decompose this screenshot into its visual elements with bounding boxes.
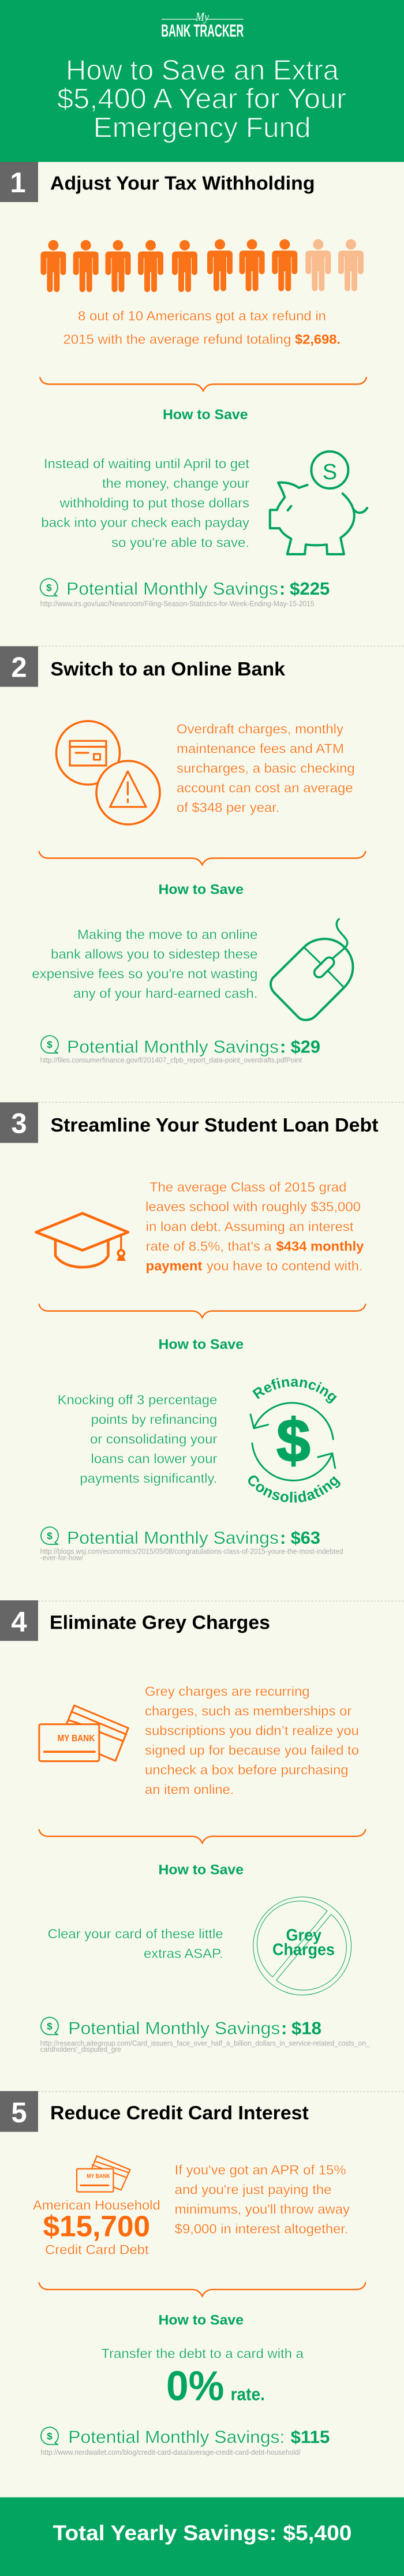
savings row 4: : [281,2018,287,2038]
how to save label: How to Save [158,1337,244,1353]
panel: header [0,0,404,162]
problem text 4: an item online. [145,1782,234,1797]
how to save text: Knocking off 3 percentage [58,1392,217,1407]
icon: dollar bubble [41,2427,58,2444]
debt statistic: $15,700 [43,2209,150,2242]
how to save text: any of your hard-earned cash. [73,986,257,1001]
how to save label: How to Save [158,2313,244,2328]
statistic text: $2,698. [295,331,341,346]
icon: refinancing consolidating cycle: Consolidating [248,1476,341,1503]
icon: refinancing consolidating cycle: $ [276,1407,311,1475]
icon: no grey charges sign: Charges [272,1941,335,1959]
logo: My Bank Tracker: BANK TRACKER [161,21,244,40]
how to save text: bank allows you to sidestep these [51,947,257,962]
heading 1: Adjust Your Tax Withholding [50,172,315,193]
source url 4 [40,2039,370,2054]
problem text 2 [177,722,355,815]
problem text 3: in loan debt. Assuming an interest [146,1219,354,1234]
how to save text: Transfer the debt to a card with a [101,2346,304,2361]
how to save text [48,1926,223,1961]
how to save text: Instead of waiting until April to get [44,456,250,471]
heading 5: Reduce Credit Card Interest [50,2102,309,2123]
how to save text: payments significantly. [80,1470,217,1485]
icon: bank cards [39,1705,128,1761]
icon: bank cards: MY BANK [58,1734,95,1744]
brace [39,1829,365,1843]
number badge 4 [0,1600,38,1641]
problem text 2: maintenance fees and ATM [177,741,344,756]
heading 2: Switch to an Online Bank [51,658,286,680]
savings row 1: $225 [290,578,330,599]
savings row 1: : [279,578,285,599]
debt statistic: Credit Card Debt [45,2242,149,2257]
problem text 3: rate of 8.5%, that's a [146,1238,272,1253]
problem text 3: leaves school with roughly $35,000 [145,1199,361,1214]
brace [39,2282,365,2296]
how to save text: Making the move to an online [77,927,257,942]
icon: dollar bubble: $ [46,582,52,593]
title: $5,400 A Year for Your [57,83,346,114]
problem text 4: signed up for because you failed to [145,1742,359,1757]
how to save label: How to Save [158,1862,244,1878]
problem text 4: subscriptions you didn’t realize you [145,1723,359,1738]
icon: bank cards small: MY BANK [87,2173,110,2179]
savings row 4: $18 [291,2018,321,2038]
source url 3: -ever-for-now/ [40,1554,83,1562]
debt statistic [33,2198,160,2257]
problem text 2: account can cost an average [177,781,353,796]
number badge 1 [0,162,38,202]
icon: computer mouse [271,919,353,1020]
icon: piggy bank with coin [270,451,367,554]
source url 5: http://www.nerdwallet.com/blog/credit-card-data/average-credit-card-debt-household/ [40,2448,301,2456]
icon: dollar bubble [41,1527,58,1544]
problem text 3: you have to contend with. [207,1258,363,1273]
how to save text: withholding to put those dollars [59,495,249,510]
panel: section 1 adjust your tax withholding [0,162,367,608]
title: Emergency Fund [93,112,311,143]
title: How to Save an Extra [66,55,339,86]
brace [39,851,365,865]
problem text 2: of $348 per year. [177,800,279,815]
brace [40,377,366,391]
icon: refinancing consolidating cycle: Refinancing [252,1377,337,1403]
problem text 5: If you've got an APR of 15% [175,2163,346,2178]
source url 3 [40,1547,343,1562]
heading 4: Eliminate Grey Charges [50,1612,270,1633]
how to save text [41,456,250,550]
icon: dollar bubble: $ [47,2021,53,2032]
problem text 4: uncheck a box before purchasing [145,1762,349,1777]
savings row 1: Potential Monthly Savings [66,578,278,599]
number badge 5 [0,2091,38,2132]
statistic text: 2015 with the average refund totaling [63,331,291,346]
how to save text: extras ASAP. [144,1946,223,1961]
how to save text: Clear your card of these little [48,1926,223,1941]
icon: dollar bubble [40,578,58,596]
problem text 3: The average Class of 2015 grad [149,1179,346,1194]
problem text 3: $434 monthly [276,1238,364,1253]
icon: dollar bubble [41,1036,58,1053]
how to save text [58,1392,218,1485]
panel: section 3 streamline your student loan debt [0,1102,379,1562]
icon row: 8 of 10 people [40,239,364,292]
number badge 5: 5 [11,2097,27,2129]
logo: My Bank Tracker: My [195,10,210,24]
icon: card and warning circles [57,721,160,824]
how to save text [32,927,257,1001]
savings row 5: Potential Monthly Savings: [68,2427,285,2447]
savings row 3: $63 [291,1528,320,1548]
logo: My Bank Tracker [161,10,244,40]
icon: no grey charges sign: Grey [286,1927,321,1945]
savings row 3: : [280,1528,286,1548]
problem text 2: Overdraft charges, monthly [177,722,344,737]
problem text 3: payment [146,1258,203,1273]
how to save label: How to Save [158,882,244,897]
source url 4: http://research.aitegroup.com/Card_issuers_face_over_half_a_billion_dollars_in_service-related_costs_on_ [40,2039,370,2047]
problem text 4: Grey charges are recurring [145,1683,310,1698]
number badge 3: 3 [11,1108,27,1140]
statistic text: 8 out of 10 Americans got a tax refund in [78,308,326,323]
number badge 3 [0,1102,38,1143]
statistic text [63,308,341,346]
how to save text: the money, change your [102,476,249,491]
icon: graduation cap [36,1214,128,1267]
problem text 4 [145,1683,359,1797]
how to save text: or consolidating your [90,1431,218,1446]
icon: dollar bubble: $ [47,1530,53,1541]
number badge 1: 1 [10,167,26,199]
problem text 5: minimums, you'll throw away [175,2202,350,2217]
heading 3: Streamline Your Student Loan Debt [51,1114,379,1136]
icon: bank cards small [77,2156,130,2192]
panel: section 5 reduce credit card interest [0,2091,366,2456]
icon: dollar bubble [41,2017,58,2034]
icon: no grey charges sign [253,1897,351,1995]
how to save label: How to Save [163,407,248,423]
how to save text: so you're able to save. [111,535,249,550]
savings row 2: : [280,1036,286,1056]
savings row 4: Potential Monthly Savings [68,2018,280,2038]
icon: dollar bubble: $ [47,1039,53,1050]
savings row 2: $29 [291,1036,320,1056]
how to save text [101,2346,304,2410]
title [57,55,346,143]
problem text 3 [145,1179,364,1273]
icon: dollar bubble: $ [47,2431,53,2441]
source url 2: http://files.consumerfinance.gov/f/201407_cfpb_report_data-point_overdrafts.pdfPoint [40,1056,302,1065]
icon: refinancing consolidating cycle [248,1377,341,1503]
source url 4: cardholders'_disputed_gre [40,2045,121,2054]
savings row 2: Potential Monthly Savings [67,1036,279,1056]
icon: piggy bank with coin: S [323,460,337,484]
how to save text: expensive fees so you're not wasting [32,966,257,981]
source url 1: http://www.irs.gov/uac/Newsroom/Filing-Season-Statistics-for-Week-Ending-May-15-2015 [40,599,315,608]
problem text 5 [175,2163,350,2237]
how to save text: points by refinancing [91,1412,217,1427]
savings row 5: $115 [291,2427,330,2447]
panel: section 4 eliminate grey charges [0,1600,370,2054]
how to save text: rate. [231,2384,265,2405]
source url 3: http://blogs.wsj.com/economics/2015/05/08/congratulations-class-of-2015-youre-the-most-indebted [40,1547,343,1556]
number badge 4: 4 [11,1607,27,1638]
how to save text: back into your check each payday [41,515,250,530]
savings row 3: Potential Monthly Savings [67,1528,279,1548]
how to save text: 0% [166,2364,224,2410]
how to save text: loans can lower your [91,1451,218,1466]
brace [39,1304,365,1317]
debt statistic: American Household [33,2198,160,2213]
panel: footer total savings [0,2497,404,2576]
problem text 4: charges, such as memberships or [145,1703,352,1718]
panel: footer total savings: Total Yearly Savings: $5,400 [53,2521,351,2545]
number badge 2 [0,646,38,687]
problem text 5: $9,000 in interest altogether. [175,2222,349,2237]
number badge 2: 2 [11,652,27,684]
problem text 2: surcharges, a basic checking [177,761,355,776]
problem text 5: and you're just paying the [175,2182,331,2197]
panel: section 2 switch to an online bank [0,646,366,1065]
